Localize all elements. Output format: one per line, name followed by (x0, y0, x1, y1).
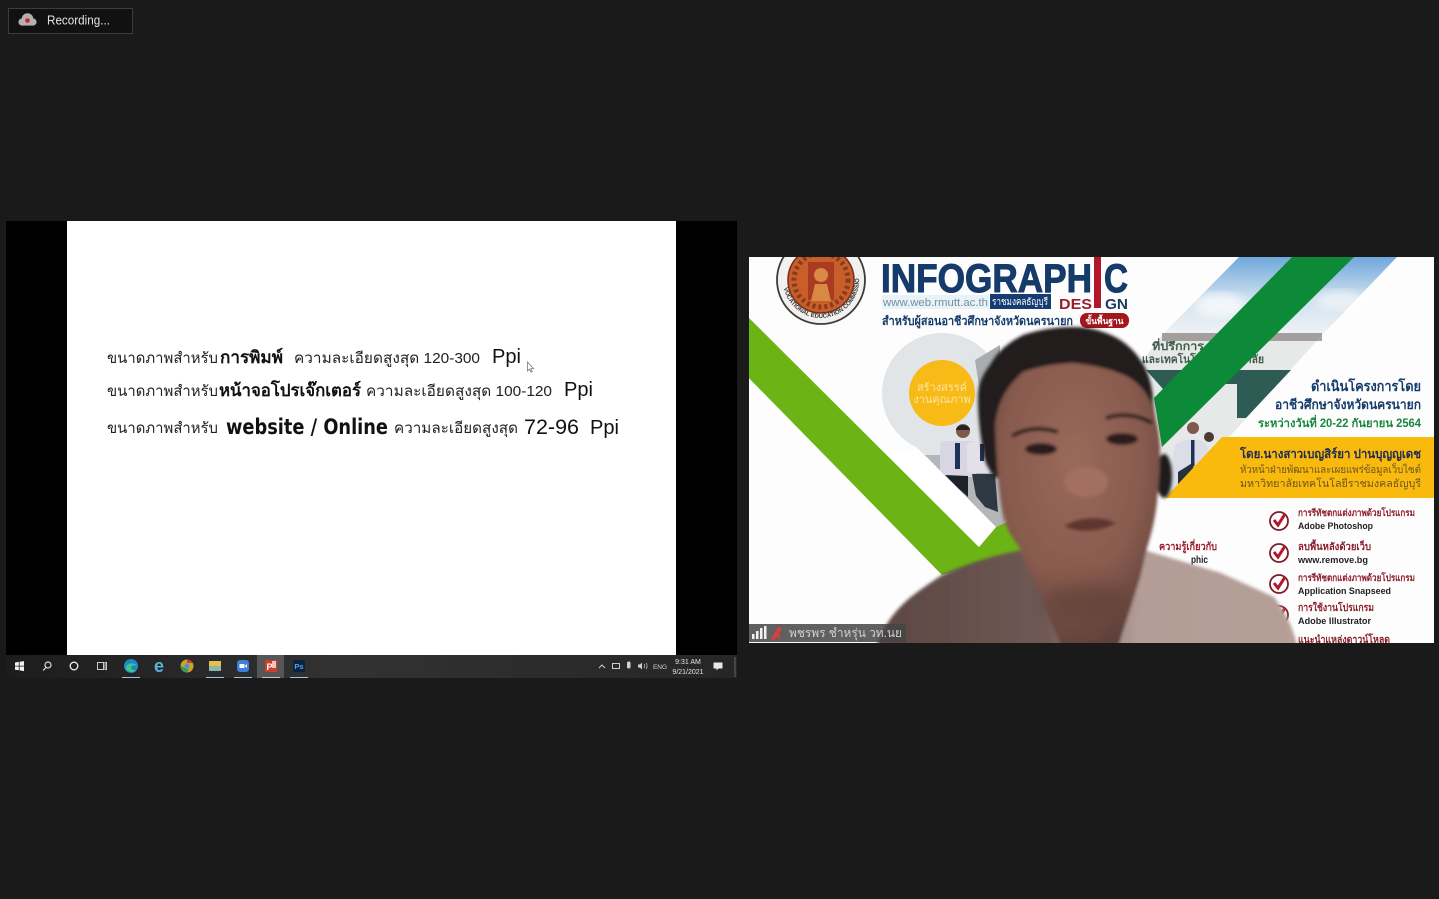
title: infographic design: DES (1059, 296, 1092, 313)
slide text: print resolution: การพิมพ์ (220, 347, 283, 367)
topic: remove background: www.remove.bg (1297, 555, 1368, 566)
dark green diagonal band (1154, 257, 1354, 447)
slide text: print resolution (107, 346, 521, 368)
topic: photoshop (1270, 507, 1415, 532)
signal bars (752, 626, 766, 639)
topic: snapseed (1270, 572, 1415, 597)
icon: search (43, 662, 51, 670)
eyebrows (1012, 415, 1152, 436)
icon: chrome (180, 659, 194, 672)
slide text: projector resolution: หน้าจอโปรเจ๊กเตอร์ (219, 380, 362, 400)
map pin photo with yellow circle (882, 333, 1005, 530)
left course label partly hidden: phic (1191, 555, 1208, 566)
topic: illustrator: การใช้งานโปรแกรม (1298, 601, 1374, 614)
topic: remove background: ลบพื้นหลังด้วยเว็บ (1298, 539, 1371, 553)
icon: zoom (234, 660, 252, 678)
icon: recording cloud (18, 13, 37, 26)
muted microphone (771, 627, 782, 640)
topic: photoshop: Adobe Photoshop (1298, 521, 1373, 532)
slide text: print resolution: ขนาดภาพสำหรับ (107, 350, 218, 367)
banner speaker role: มหาวิทยาลัยเทคโนโลยีราชมงคลธัญบุรี (1240, 477, 1421, 490)
emblem logo: VOCATIONAL EDUCATION COMMISSION (784, 278, 860, 318)
yellow circle label (909, 360, 975, 426)
windows taskbar (6, 655, 737, 678)
icon: edge (122, 659, 140, 678)
name bar (749, 624, 906, 642)
title: infographic design: www.web.rmutt.ac.th (882, 297, 988, 309)
banner speaker role (1240, 462, 1421, 490)
body and shoulders (876, 550, 1298, 650)
icon: cortana (70, 662, 78, 670)
hair behind right ear (1156, 454, 1172, 498)
topic: remove background (1270, 539, 1371, 566)
face and neck (995, 363, 1160, 650)
topic: snapseed: Application Snapseed (1298, 586, 1391, 597)
slide text: website resolution: 72-96 (524, 416, 579, 439)
slide text: website resolution: website / Online (226, 415, 388, 439)
slide text: website resolution: Ppi (590, 417, 619, 439)
slide text: projector resolution (107, 379, 593, 401)
title: infographic design: GN (1105, 296, 1128, 313)
sky and building band (1141, 257, 1397, 470)
course topic list (1270, 507, 1415, 646)
title: infographic design: ราชมงคลธัญบุรี (992, 296, 1049, 308)
emblem logo (749, 257, 866, 358)
icon: photoshop (290, 660, 308, 678)
banner speaker role: หัวหน้าฝ่ายพัฒนาและเผยแพร่ข้อมูลเว็บไซต์ (1240, 462, 1421, 476)
left course label partly hidden: ความรู้เกี่ยวกับ (1159, 538, 1217, 554)
students on the right (1166, 422, 1214, 498)
project organiser text: ดำเนินโครงการโดย (1311, 377, 1421, 394)
topic: snapseed: การรีทัชตกแต่งภาพด้วยโปรแกรม (1298, 572, 1415, 584)
slide text: website resolution (107, 415, 619, 439)
topic: illustrator: Adobe Illustrator (1298, 616, 1371, 627)
mouse cursor (528, 362, 534, 372)
system tray: ENG (653, 664, 667, 671)
participant name: พชรพร ชำหรุ่น วท.นย (789, 626, 902, 641)
icon: windows start (15, 661, 24, 671)
topic: photoshop: การรีทัชตกแต่งภาพด้วยโปรแกรม (1298, 507, 1415, 519)
icon: photoshop: Ps (294, 662, 304, 671)
recording label: Recording... (47, 12, 110, 28)
yellow circle label: สร้างสรรค์ (917, 381, 967, 394)
icon: file explorer (206, 661, 224, 678)
subtitle with pill: สำหรับผู้สอนอาชีวศึกษาจังหวัดนครนายก (882, 314, 1073, 329)
mouth (1064, 518, 1116, 531)
nose (1064, 467, 1108, 497)
presenter (876, 327, 1298, 650)
icon: task view (98, 662, 106, 670)
light green diagonal band (739, 308, 1025, 575)
title: infographic design: C (1104, 257, 1128, 301)
project organiser text (1258, 377, 1422, 430)
hair (978, 327, 1160, 478)
building signage: ที่ปรึกการ (1152, 338, 1204, 353)
icon: internet explorer: e (154, 656, 164, 676)
panel: webcam video (749, 257, 1434, 643)
project organiser text: อาชีวศึกษาจังหวัดนครนายก (1275, 397, 1421, 412)
students photo (940, 424, 998, 512)
recording badge (8, 8, 132, 34)
sky and building band: และเทคโนโลยีมหาวิทยาลัย (1142, 352, 1264, 366)
icon: powerpoint: P (266, 662, 273, 672)
banner speaker name: โดย.นางสาวเบญสิร์ยา ปานบุญญเดช (1239, 446, 1421, 462)
system tray: 9/21/2021 (672, 669, 704, 676)
yellow banner (1165, 437, 1439, 498)
subtitle with pill: ขั้นพื้นฐาน (1086, 314, 1124, 327)
panel: shared slide (6, 221, 737, 655)
eyes (1025, 443, 1057, 455)
topic: illustrator (1276, 602, 1374, 624)
icon: powerpoint (257, 655, 284, 678)
slide text: projector resolution: ความละเอียดสูงสุด 100-120 (366, 383, 552, 401)
building windows (1146, 370, 1291, 418)
topic: download sources: แนะนำแหล่งดาวน์โหลด (1298, 633, 1390, 646)
yellow circle label: งานคุณภาพ (913, 394, 971, 406)
slide text: projector resolution: ขนาดภาพสำหรับ (107, 383, 218, 400)
slide text: website resolution: ขนาดภาพสำหรับ (107, 420, 218, 437)
system tray (599, 657, 736, 677)
slide text: print resolution: Ppi (492, 346, 521, 368)
system tray: 9:31 AM (675, 659, 701, 666)
title: infographic design: INFOGRAPH (881, 257, 1092, 301)
slide text: print resolution: ความละเอียดสูงสุด 120-300 (294, 350, 480, 368)
building wall (1141, 333, 1324, 470)
project organiser text: ระหว่างวันที่ 20-22 กันยายน 2564 (1258, 414, 1422, 430)
slide text: website resolution: ความละเอียดสูงสุด (394, 420, 518, 438)
left course label partly hidden (1159, 538, 1217, 566)
chin shadow (1045, 582, 1125, 618)
slide text: projector resolution: Ppi (564, 379, 593, 401)
